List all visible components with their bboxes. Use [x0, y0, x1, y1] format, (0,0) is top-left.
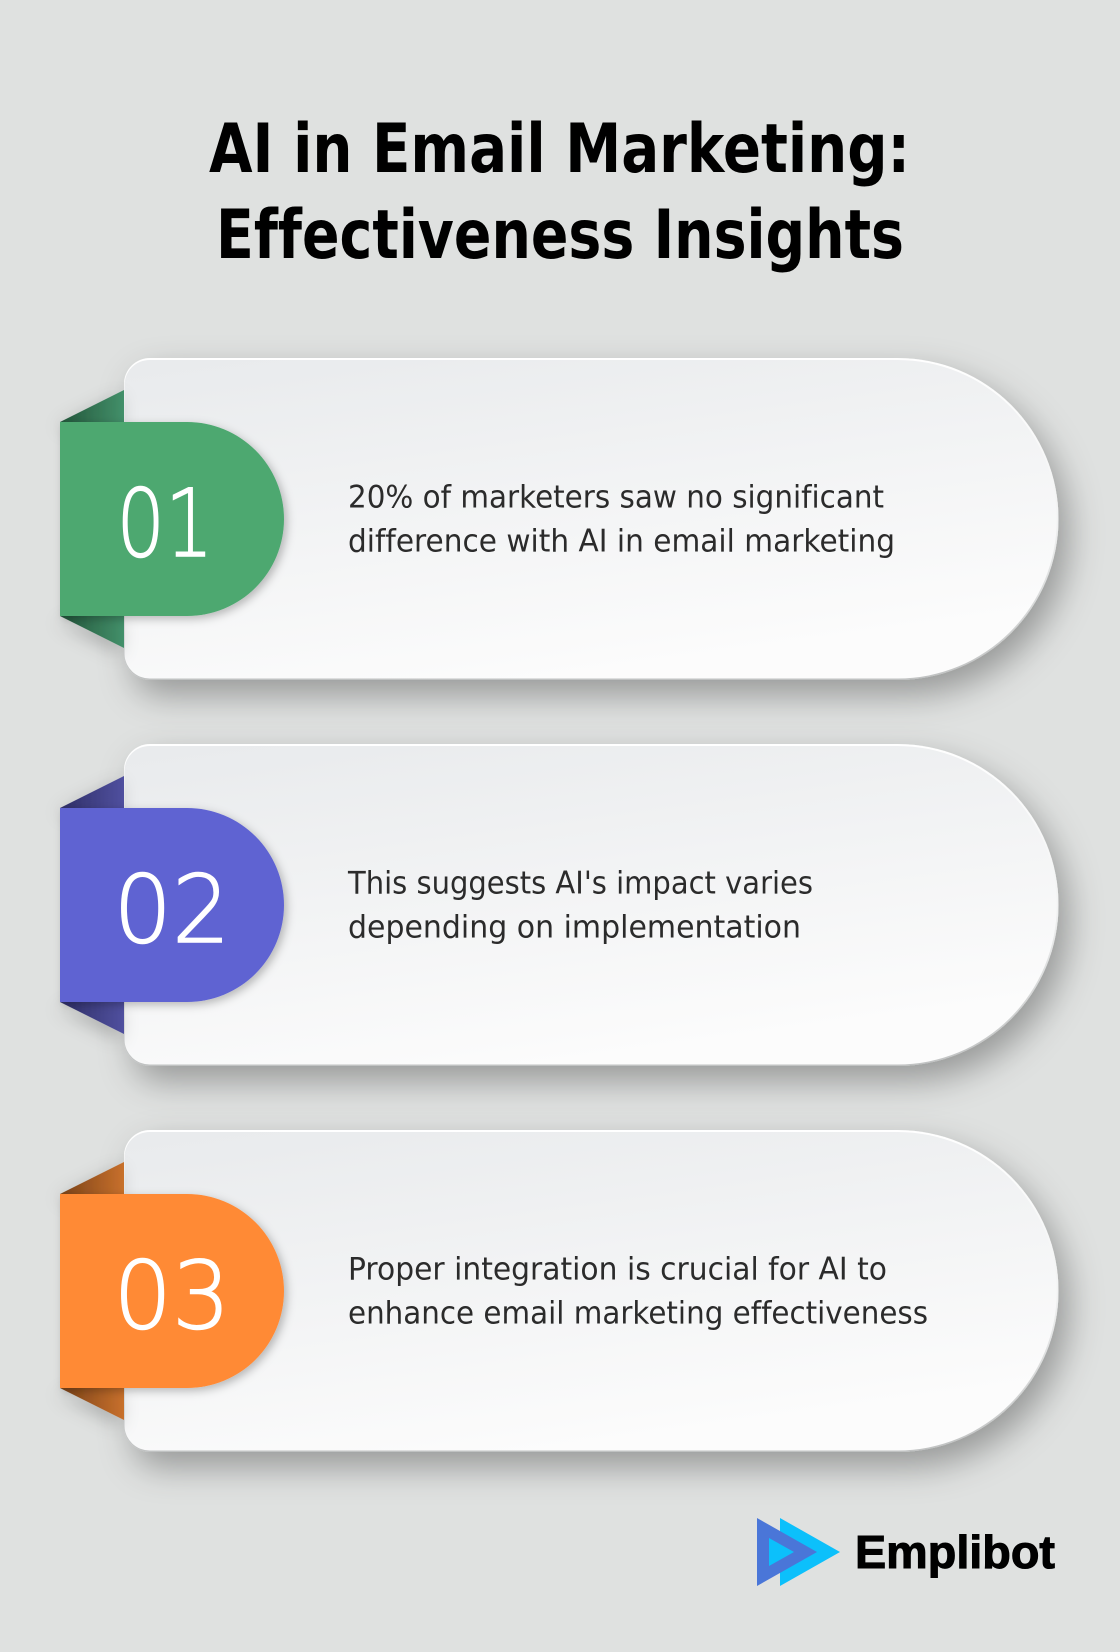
title: Effectiveness Insights: [216, 196, 904, 275]
card 01: [124, 358, 1058, 680]
number 01: 01: [116, 470, 214, 579]
text 01: difference with AI in email marketing: [348, 524, 895, 560]
text 02: depending on implementation: [348, 910, 801, 946]
ribbon folds 03: [60, 1162, 124, 1420]
card 02: [124, 744, 1058, 1066]
card 03: [124, 1130, 1058, 1452]
title: AI in Email Marketing:: [209, 110, 910, 189]
panel: step 03: [60, 1130, 1058, 1452]
number 02: 02: [114, 856, 230, 965]
logo: Emplibot: [757, 1518, 1055, 1586]
card 03 face: [124, 1132, 1057, 1451]
badge 02: [60, 808, 284, 1002]
ribbon folds 01: [60, 390, 124, 648]
ribbon folds 02: [60, 776, 124, 1034]
badge 01: [60, 422, 284, 616]
text 01: 20% of marketers saw no significant: [348, 480, 884, 516]
icon: play triangles: [757, 1518, 840, 1586]
text 02: This suggests AI's impact varies: [347, 866, 813, 902]
number 03: 03: [114, 1242, 230, 1351]
text 03: [348, 1252, 928, 1332]
card 02 face: [124, 746, 1057, 1065]
panel: step 02: [60, 744, 1058, 1066]
title: [209, 110, 910, 275]
badge 03: [60, 1194, 284, 1388]
card 01 face: [124, 360, 1057, 679]
wordmark: Emplibot: [855, 1526, 1055, 1578]
text 03: enhance email marketing effectiveness: [348, 1296, 928, 1332]
text 01: [348, 480, 895, 560]
panel: step 01: [60, 358, 1058, 680]
text 03: Proper integration is crucial for AI to: [348, 1252, 887, 1288]
text 02: [347, 866, 813, 946]
